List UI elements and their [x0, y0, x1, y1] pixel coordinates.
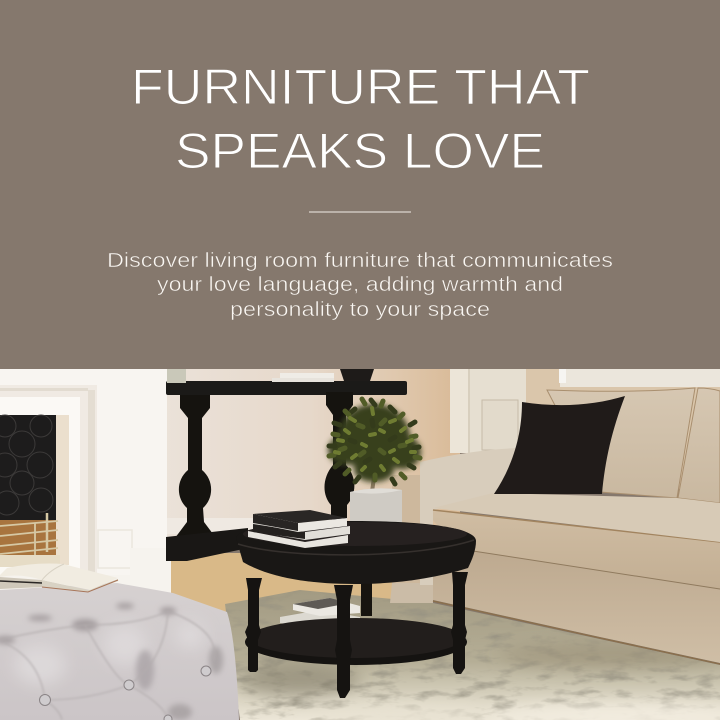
subtitle text: personality to your space	[230, 299, 490, 321]
ottoman	[0, 583, 239, 720]
sofa back cushions	[547, 388, 695, 498]
floor	[171, 553, 392, 612]
table back leg	[361, 580, 372, 616]
window	[560, 369, 720, 387]
panel: brown header	[0, 0, 720, 369]
subtitle text: Discover living room furniture that communicates	[107, 250, 613, 272]
ottoman buttons	[40, 666, 211, 720]
rug	[220, 585, 720, 720]
table legs	[245, 578, 262, 672]
plant pot	[350, 488, 402, 522]
sofa	[390, 388, 720, 664]
coffee table	[236, 510, 476, 698]
subtitle text	[107, 250, 613, 321]
table top	[236, 521, 476, 584]
sofa arm	[420, 448, 518, 585]
seat top	[433, 493, 720, 542]
lower shelf books	[280, 598, 360, 624]
title	[131, 59, 590, 179]
table books	[248, 510, 350, 548]
panel: living room photo	[0, 369, 720, 720]
fireplace	[0, 369, 171, 597]
back wall	[160, 369, 460, 539]
open book	[0, 564, 118, 592]
door	[450, 369, 526, 453]
plant	[328, 399, 421, 492]
lower shelf	[245, 638, 467, 665]
sofa skirt	[433, 549, 720, 663]
black pillow	[494, 396, 625, 494]
sofa side panel	[392, 475, 422, 583]
subtitle text: your love language, adding warmth and	[157, 274, 563, 296]
divider line	[309, 212, 411, 213]
title: FURNITURE THAT	[131, 59, 590, 115]
console table	[166, 369, 407, 561]
seat cushion front	[433, 510, 720, 589]
fender rails	[0, 513, 58, 555]
title: SPEAKS LOVE	[175, 123, 545, 179]
